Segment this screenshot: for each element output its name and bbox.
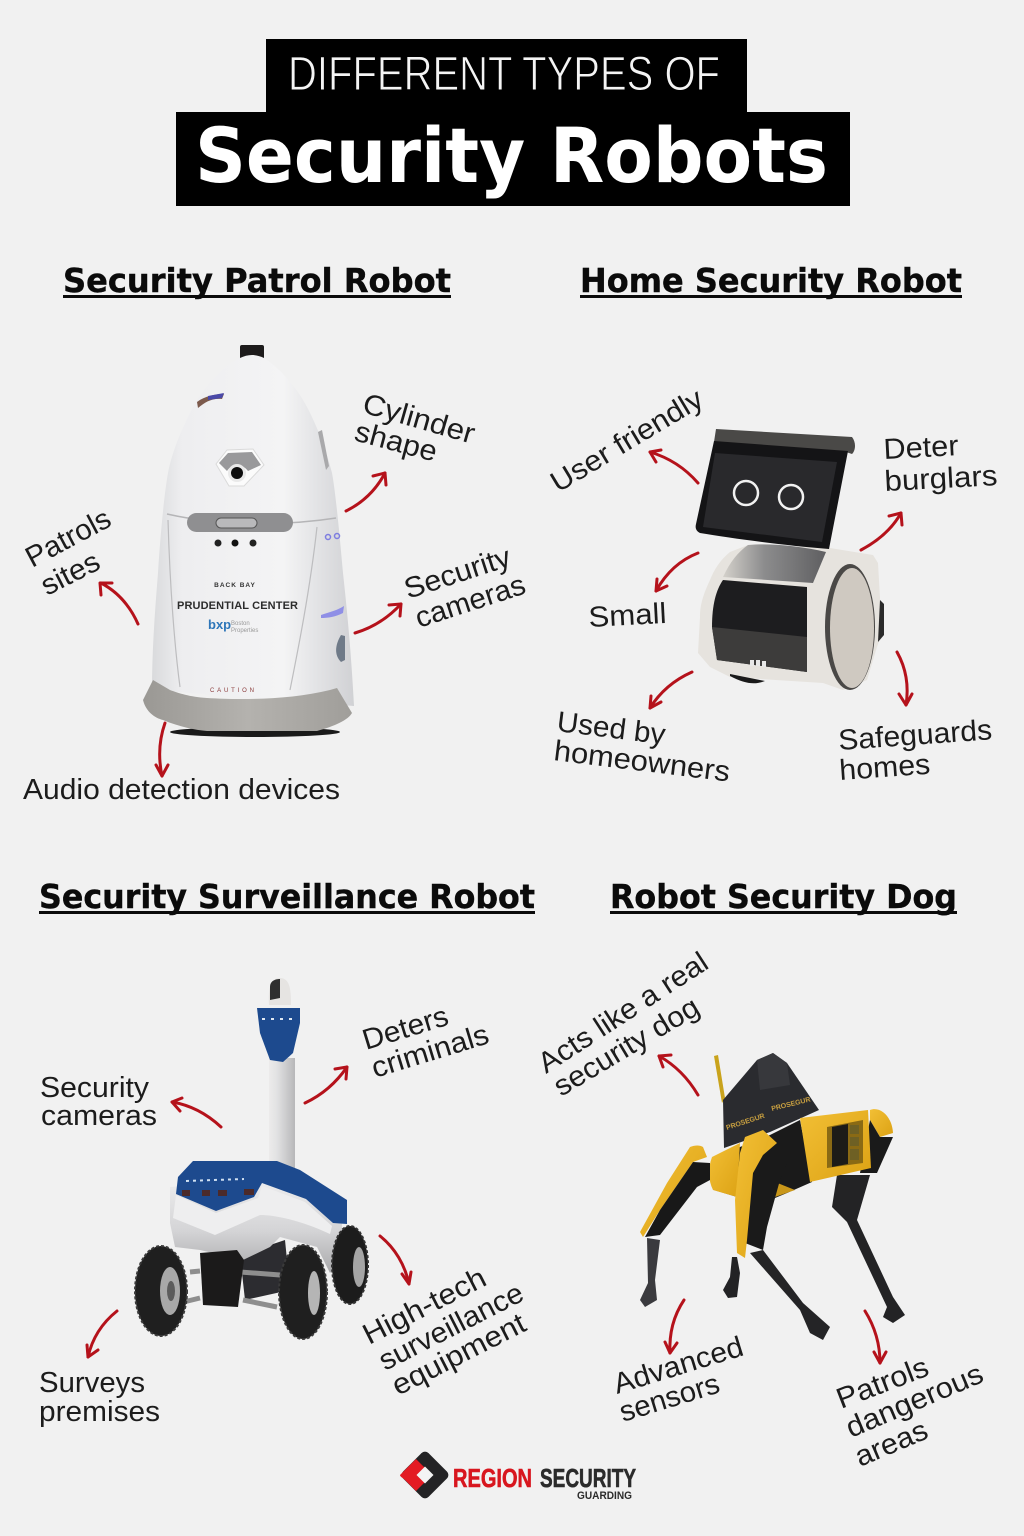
logo: region security guarding: SECURITY [540, 1463, 636, 1493]
panel: robot security dog [532, 877, 988, 1473]
logo: region security guarding [400, 1450, 636, 1502]
label: cylinder shape: Cylinder [359, 388, 479, 451]
image: patrol robot: Properties [231, 628, 258, 634]
label: acts like a real security dog: security dog [548, 991, 705, 1103]
image: patrol robot: Boston [231, 621, 250, 627]
arrow: to acts like a real dog [659, 1055, 698, 1095]
panel: home security robot [545, 261, 998, 789]
heading: security patrol robot: Security Patrol Robot [63, 261, 451, 300]
label: patrols dangerous areas: areas [850, 1414, 933, 1473]
image: patrol robot: PRUDENTIAL CENTER [177, 600, 298, 612]
arrow: to small [656, 553, 698, 591]
image: patrol robot: CAUTION [210, 688, 254, 694]
label: small: Small [588, 598, 667, 634]
image: patrol robot [143, 345, 354, 737]
label: audio detection devices: Audio detection devices [23, 774, 340, 806]
label: patrols sites [20, 503, 117, 602]
image: robot dog [640, 1053, 905, 1340]
arrow: to advanced sensors [665, 1300, 684, 1353]
label: deter burglars [883, 430, 998, 498]
arrow: to safeguards homes [897, 652, 912, 705]
panel: security patrol robot [20, 261, 530, 806]
arrow: to deter burglars [861, 513, 902, 550]
label: surveys premises: Surveys [39, 1367, 145, 1399]
label: deter burglars: Deter [883, 430, 960, 466]
label: deters criminals: criminals [368, 1019, 493, 1085]
arrow: to patrols dangerous areas [865, 1311, 886, 1363]
label: patrols sites: Patrols [20, 503, 117, 574]
heading: home security robot: Home Security Robot [580, 261, 962, 300]
label: deters criminals: Deters [359, 1000, 452, 1057]
arrow: to security cameras [172, 1098, 221, 1127]
label: advanced sensors [610, 1331, 747, 1429]
label: security cameras: Security [400, 541, 515, 606]
arrow: to patrols sites [100, 583, 138, 624]
label: security cameras [40, 1072, 157, 1132]
image: robot dog: PROSEGUR [771, 1096, 811, 1113]
label: cylinder shape [351, 388, 479, 469]
image: surveillance robot [135, 978, 368, 1339]
label: safeguards homes: Safeguards [837, 714, 993, 757]
image: home robot [696, 429, 884, 690]
arrow: to used by homeowners [650, 672, 692, 708]
label: deter burglars: burglars [884, 460, 998, 498]
label: surveys premises: premises [39, 1396, 160, 1428]
label: cylinder shape: shape [351, 416, 441, 469]
heading: robot security dog: Robot Security Dog [610, 877, 957, 916]
label: advanced sensors: sensors [616, 1368, 724, 1429]
title [176, 39, 850, 206]
label: high-tech surveillance equipment: equipment [387, 1307, 531, 1402]
label: patrols sites: sites [36, 546, 105, 602]
arrow: to cylinder shape [346, 473, 386, 511]
arrow: to user friendly [650, 450, 698, 483]
image: patrol robot: BACK BAY [214, 582, 256, 589]
arrow: to high-tech equipment [380, 1236, 411, 1284]
icon: diamond mark [400, 1450, 450, 1500]
label: used by homeowners: Used by [555, 706, 668, 751]
image: robot dog: PROSEGUR [725, 1113, 766, 1132]
label: patrols dangerous areas: dangerous [841, 1358, 988, 1444]
label: security cameras: cameras [41, 1100, 157, 1132]
arrow: to audio detection [156, 723, 168, 776]
label: acts like a real security dog: Acts like a real [532, 946, 714, 1080]
heading: security surveillance robot: Security Surveillance Robot [39, 877, 535, 916]
label: security cameras [400, 541, 530, 635]
label: security cameras: Security [40, 1072, 150, 1104]
label: safeguards homes: homes [838, 749, 931, 787]
label: user friendly: User friendly [545, 383, 709, 499]
label: advanced sensors: Advanced [610, 1331, 747, 1401]
label: safeguards homes [837, 714, 993, 787]
label: patrols dangerous areas [832, 1351, 988, 1473]
title: DIFFERENT TYPES OF [288, 48, 720, 101]
label: surveys premises [39, 1367, 160, 1428]
arrow: to security cameras [355, 604, 401, 633]
label: deters criminals [359, 1000, 493, 1085]
arrow: to deters criminals [305, 1067, 347, 1103]
arrow: to surveys premises [87, 1311, 117, 1357]
title: Security Robots [195, 111, 828, 200]
label: security cameras: cameras [411, 569, 530, 635]
label: high-tech surveillance equipment: High-tech [358, 1262, 492, 1351]
label: high-tech surveillance equipment [358, 1262, 531, 1402]
logo: region security guarding: GUARDING [577, 1490, 632, 1502]
image: patrol robot: bxp [208, 617, 231, 632]
logo: region security guarding: REGION [453, 1463, 532, 1493]
label: patrols dangerous areas: Patrols [832, 1351, 933, 1416]
label: used by homeowners: homeowners [552, 735, 732, 789]
panel: security surveillance robot [39, 877, 535, 1428]
label: used by homeowners [552, 706, 732, 789]
label: high-tech surveillance equipment: surveillance [374, 1277, 529, 1377]
